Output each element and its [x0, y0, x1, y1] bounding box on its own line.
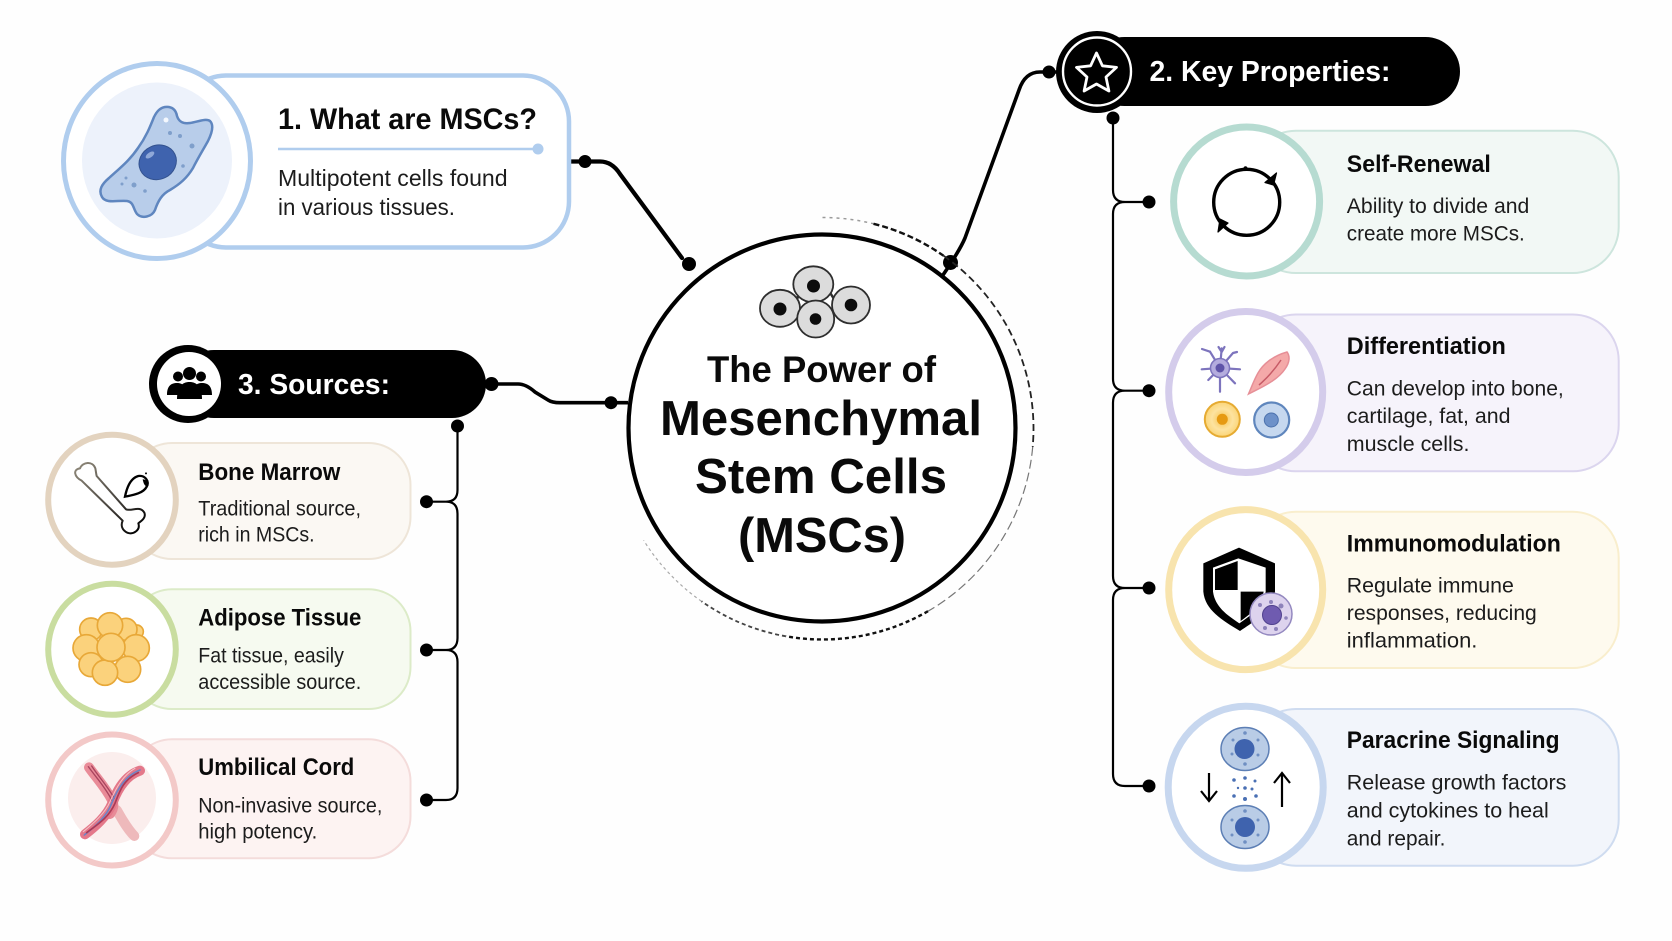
- blue cell: [1254, 402, 1289, 438]
- icon: umbilical cord: [48, 734, 176, 866]
- self-renewal text: Ability to divide and: [1347, 195, 1529, 218]
- bone marrow text: [198, 459, 361, 547]
- tree lines: sources: [420, 420, 464, 806]
- icon: shield with immune cell: [1169, 510, 1323, 670]
- center title: The Power of: [707, 349, 937, 390]
- panel 1 icon: MSC cell: [64, 64, 250, 258]
- sources pill: [149, 345, 486, 423]
- self-renewal text: [1347, 151, 1529, 246]
- card: bone marrow: [48, 435, 410, 565]
- adipose text: accessible source.: [198, 671, 361, 694]
- icon: differentiated cells: [1169, 312, 1323, 472]
- connector: MSCs panel to center: [569, 155, 696, 271]
- adipose card background: [130, 589, 410, 709]
- dashed orbit ring: [644, 218, 1033, 639]
- header: key properties: [1056, 31, 1460, 113]
- icon: star: [1063, 38, 1131, 106]
- neuron: [1202, 347, 1240, 392]
- bone marrow text: Bone Marrow: [198, 459, 341, 486]
- differentiation text: Can develop into bone,: [1347, 378, 1564, 401]
- adipose text: [198, 605, 361, 694]
- immunomodulation text: responses, reducing: [1347, 602, 1537, 625]
- signaling dots: [1232, 776, 1258, 801]
- icon: cell cluster: [760, 266, 870, 338]
- icon: people: [157, 352, 221, 416]
- paracrine text: and cytokines to heal: [1347, 799, 1549, 822]
- bone marrow text: Traditional source,: [198, 498, 361, 521]
- umbilical text: Umbilical Cord: [198, 754, 354, 781]
- card: self-renewal: [1174, 127, 1619, 276]
- paracrine card background: [1250, 709, 1619, 866]
- yellow cell: [1205, 402, 1240, 437]
- panel 1 heading: 1. What are MSCs?: [278, 103, 537, 136]
- icon: bone: [48, 435, 176, 565]
- self-renewal card background: [1250, 131, 1619, 273]
- card: umbilical cord: [48, 734, 410, 866]
- differentiation card background: [1250, 314, 1619, 471]
- umbilical text: high potency.: [198, 820, 317, 843]
- differentiation text: Differentiation: [1347, 333, 1506, 360]
- tree lines: key properties: [1106, 112, 1156, 792]
- connector: key properties to center: [943, 66, 1056, 275]
- icon: renewal cycle: [1174, 127, 1320, 276]
- card: adipose tissue: [48, 584, 410, 715]
- immunomodulation text: [1347, 531, 1561, 653]
- self-renewal text: Self-Renewal: [1347, 151, 1491, 178]
- panel 1 description: Multipotent cells found: [278, 165, 508, 191]
- key properties pill: [1056, 31, 1460, 113]
- immunomodulation card background: [1250, 512, 1619, 668]
- main circle: [628, 234, 1016, 622]
- connector: sources to center: [484, 377, 628, 409]
- center circle: [628, 218, 1033, 639]
- differentiation text: cartilage, fat, and: [1347, 405, 1510, 428]
- bone marrow card background: [130, 443, 410, 559]
- center title: Stem Cells: [695, 450, 947, 504]
- sources heading: 3. Sources:: [238, 369, 390, 401]
- adipose text: Fat tissue, easily: [198, 644, 344, 667]
- self-renewal text: create more MSCs.: [1347, 223, 1525, 246]
- paracrine text: Release growth factors: [1347, 771, 1566, 794]
- icon: fat cells: [48, 584, 176, 715]
- panel 1 description: in various tissues.: [278, 194, 455, 220]
- paracrine text: and repair.: [1347, 828, 1445, 851]
- header: sources: [149, 345, 486, 423]
- bone marrow text: rich in MSCs.: [198, 524, 315, 547]
- differentiation text: muscle cells.: [1347, 433, 1469, 456]
- arrow: up: [1274, 773, 1290, 807]
- card: immunomodulation: [1169, 510, 1619, 670]
- umbilical card background: [130, 739, 410, 858]
- center title: (MSCs): [738, 509, 906, 563]
- muscle cell: [1248, 352, 1289, 394]
- center title: [660, 349, 982, 563]
- panel 1 card: [180, 76, 569, 248]
- key properties heading: 2. Key Properties:: [1150, 56, 1390, 88]
- panel 1 description: [278, 165, 508, 220]
- card: differentiation: [1169, 312, 1619, 472]
- icon: paracrine signaling cells: [1168, 706, 1323, 868]
- card: paracrine signaling: [1168, 706, 1619, 868]
- panel 1 divider with dot: [278, 144, 544, 154]
- adipose text: Adipose Tissue: [198, 605, 361, 632]
- immunomodulation text: inflammation.: [1347, 630, 1477, 653]
- arrow: down: [1201, 773, 1217, 801]
- center title: Mesenchymal: [660, 392, 982, 446]
- paracrine text: Paracrine Signaling: [1347, 727, 1560, 754]
- immunomodulation text: Regulate immune: [1347, 574, 1514, 597]
- paracrine text: [1347, 727, 1566, 851]
- differentiation text: [1347, 333, 1564, 456]
- umbilical text: Non-invasive source,: [198, 794, 382, 817]
- panel 1: what are MSCs: [64, 64, 569, 258]
- immunomodulation text: Immunomodulation: [1347, 531, 1561, 558]
- umbilical text: [198, 754, 382, 843]
